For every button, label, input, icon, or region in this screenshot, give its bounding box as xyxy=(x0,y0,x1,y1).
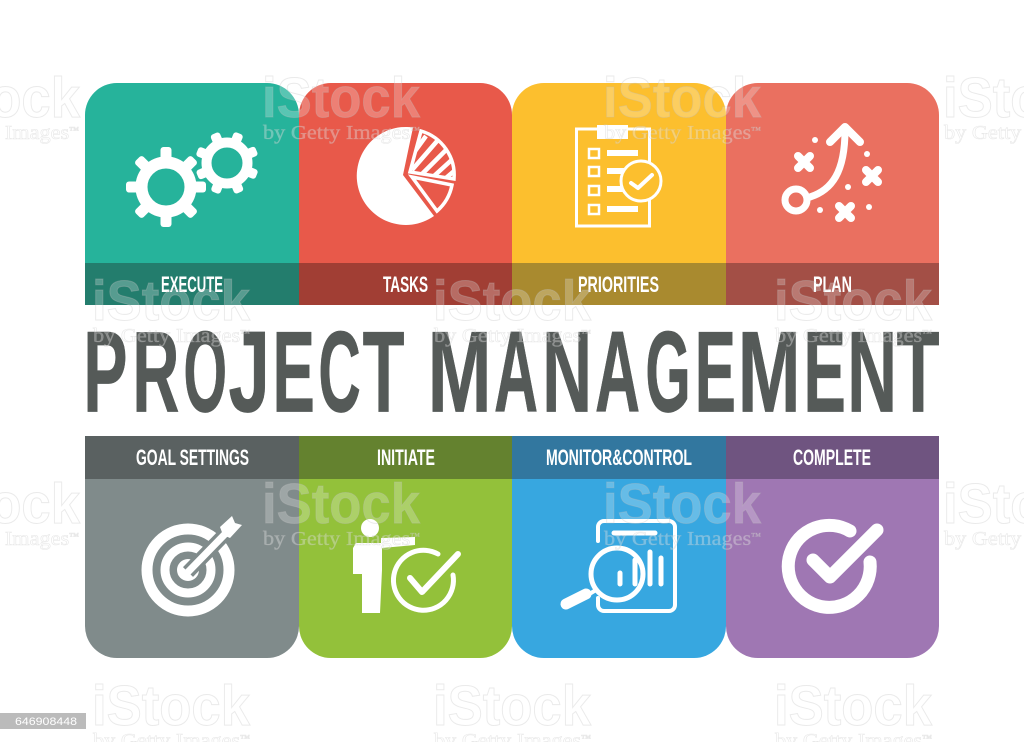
title: T xyxy=(897,308,940,436)
panel: execute xyxy=(85,83,299,305)
label: initiate: INITIATE xyxy=(377,445,435,470)
title: P xyxy=(83,308,128,436)
watermark row 1 xyxy=(0,66,1024,144)
image id tag xyxy=(0,713,86,729)
watermark row 3: by Getty Images xyxy=(604,528,736,550)
panel: complete xyxy=(726,436,939,658)
watermark row 3: iStock xyxy=(262,472,420,536)
panel: tasks xyxy=(299,83,512,305)
watermark row 2: ™ xyxy=(922,328,932,338)
watermark row 1: ™ xyxy=(410,125,420,135)
label: monitor and control: MONITOR&CONTROL xyxy=(546,445,692,470)
watermark row 2: ™ xyxy=(240,328,250,338)
watermark row 2 xyxy=(92,269,932,347)
title: J xyxy=(228,308,270,436)
watermark row 4: iStock xyxy=(433,674,591,738)
watermark row 1: iStock xyxy=(603,66,761,130)
icon: check circle xyxy=(788,525,877,607)
title: G xyxy=(645,308,691,436)
watermark row 2: iStock xyxy=(774,269,932,333)
title: M xyxy=(738,308,800,436)
watermark row 3: ™ xyxy=(410,531,420,541)
icon: person with check xyxy=(353,519,458,613)
panel: initiate xyxy=(299,436,512,658)
title: E xyxy=(804,308,846,436)
title: E xyxy=(695,308,736,436)
watermark row 4 xyxy=(92,674,932,742)
watermark row 1: ™ xyxy=(751,125,761,135)
watermark row 3: by Getty Images xyxy=(263,528,395,550)
watermark row 3: iStock xyxy=(603,472,761,536)
watermark row 3: ™ xyxy=(751,531,761,541)
title: N xyxy=(847,308,897,436)
image id tag: 646908448 xyxy=(15,716,77,728)
panel: goal settings xyxy=(85,436,299,658)
label: tasks: TASKS xyxy=(383,272,428,297)
label: complete: COMPLETE xyxy=(793,445,871,470)
icon: gears xyxy=(126,131,259,227)
watermark row 2: by Getty Images xyxy=(434,325,566,347)
title: A xyxy=(595,308,640,436)
watermark row 1: iStock xyxy=(262,66,420,130)
label: goal settings: GOAL SETTINGS xyxy=(136,445,249,470)
watermark row 2: iStock xyxy=(433,269,591,333)
watermark row 2: by Getty Images xyxy=(93,325,225,347)
label: priorities: PRIORITIES xyxy=(578,272,659,297)
watermark row 3: ™ xyxy=(69,531,79,541)
label: plan: PLAN xyxy=(813,272,852,297)
watermark row 2: iStock xyxy=(92,269,250,333)
watermark row 1: by Getty Images xyxy=(604,122,736,144)
title: N xyxy=(542,308,592,436)
label: execute: EXECUTE xyxy=(161,272,223,297)
panel: plan xyxy=(726,83,939,305)
icon: target with arrow xyxy=(147,516,242,611)
title: C xyxy=(318,308,361,436)
title: O xyxy=(184,308,227,436)
icon: checklist clipboard xyxy=(576,125,661,226)
title: E xyxy=(272,308,315,436)
title: M xyxy=(428,308,492,436)
title: A xyxy=(494,308,538,436)
watermark row 4: iStock xyxy=(92,674,250,738)
title: T xyxy=(363,308,404,436)
watermark row 2: by Getty Images xyxy=(775,325,907,347)
icon: pie chart xyxy=(357,127,460,225)
watermark row 1: ™ xyxy=(69,125,79,135)
panel: priorities xyxy=(512,83,726,305)
watermark row 2: ™ xyxy=(581,328,591,338)
panel: monitor and control xyxy=(512,436,726,658)
icon: magnifier over report xyxy=(566,521,675,611)
title: R xyxy=(132,308,179,436)
watermark row 3 xyxy=(0,472,1024,550)
icon: strategy play xyxy=(785,127,878,218)
watermark row 4: iStock xyxy=(774,674,932,738)
watermark row 1: by Getty Images xyxy=(263,122,395,144)
